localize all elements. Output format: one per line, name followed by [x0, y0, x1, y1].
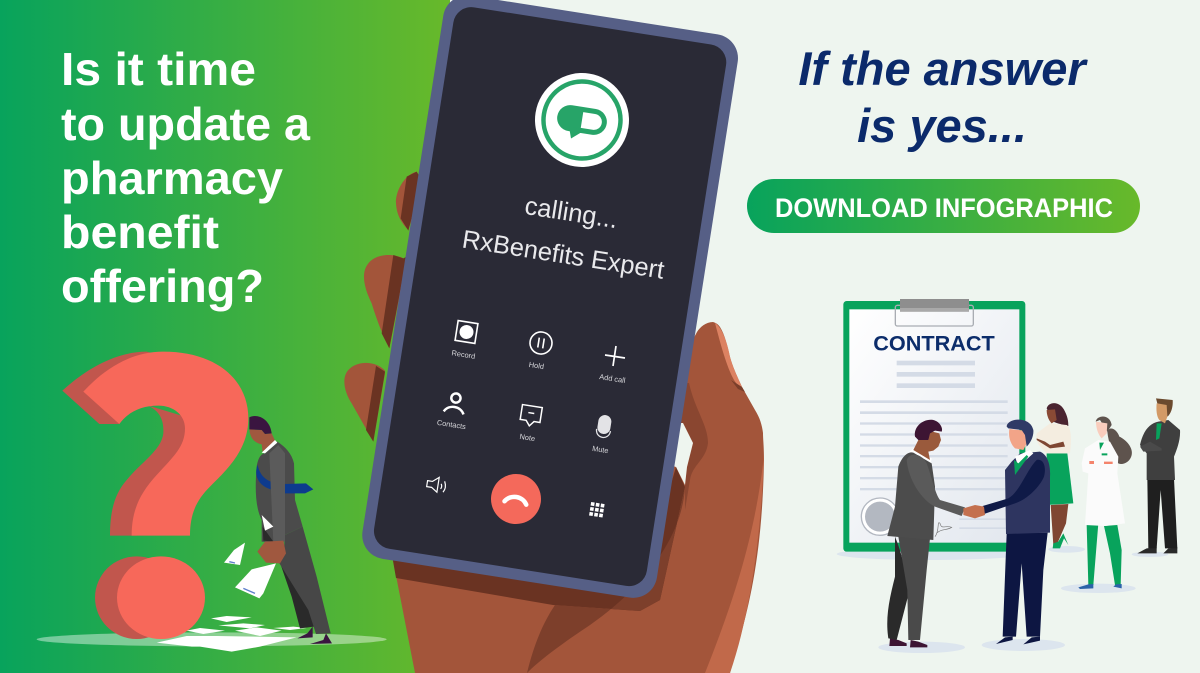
heading: question: to update a	[61, 98, 311, 150]
palm and thumb	[392, 322, 764, 673]
person: woman in green skirt	[1036, 403, 1085, 553]
person: man shaking hands right	[963, 420, 1065, 651]
phone screen	[371, 5, 729, 589]
calling text: calling...	[523, 192, 620, 234]
icon: record	[455, 321, 478, 343]
person: man shaking hands left	[878, 420, 965, 653]
illustration: question mark and papers	[37, 352, 387, 652]
call option labels: Record	[451, 348, 476, 361]
call option labels	[436, 348, 626, 455]
finger three	[344, 363, 385, 442]
heading: if the answer is yes	[798, 42, 1088, 152]
person: man with crossed arms	[1132, 398, 1180, 557]
clipboard contract	[837, 299, 1025, 560]
call option labels: Note	[519, 432, 536, 443]
heading: question	[61, 43, 311, 312]
calling text	[460, 192, 666, 285]
heading: question: offering?	[61, 260, 264, 312]
icon: keypad	[589, 502, 605, 518]
download button: DOWNLOAD INFOGRAPHIC	[775, 193, 1113, 223]
call option labels: Add call	[599, 372, 626, 385]
illustration: stressed man	[224, 416, 332, 644]
heading: if the answer is yes: is yes...	[857, 99, 1027, 152]
contract title: CONTRACT	[873, 330, 995, 355]
heading: question: benefit	[61, 206, 219, 258]
icon: mute microphone	[595, 414, 613, 438]
phone	[359, 0, 741, 601]
finger one	[396, 172, 422, 231]
hand holding phone	[344, 172, 764, 673]
RxBenefits logo	[528, 66, 636, 174]
icon: add call	[605, 346, 625, 366]
download button	[747, 179, 1140, 233]
icon: contacts	[444, 392, 467, 414]
heading: question: Is it time	[61, 43, 256, 95]
end call button	[487, 470, 545, 528]
heading: if the answer is yes: If the answer	[798, 42, 1088, 95]
call option labels: Hold	[528, 360, 545, 371]
heading: question: pharmacy	[61, 152, 283, 204]
calling text: RxBenefits Expert	[460, 225, 666, 285]
icon: hold	[528, 330, 554, 356]
call option labels: Mute	[592, 444, 609, 455]
icon: speaker	[426, 476, 447, 493]
person: doctor	[1061, 416, 1136, 593]
call option labels: Contacts	[436, 418, 467, 431]
finger two	[364, 255, 407, 348]
icon: note	[519, 405, 542, 427]
green background panel	[0, 0, 450, 673]
